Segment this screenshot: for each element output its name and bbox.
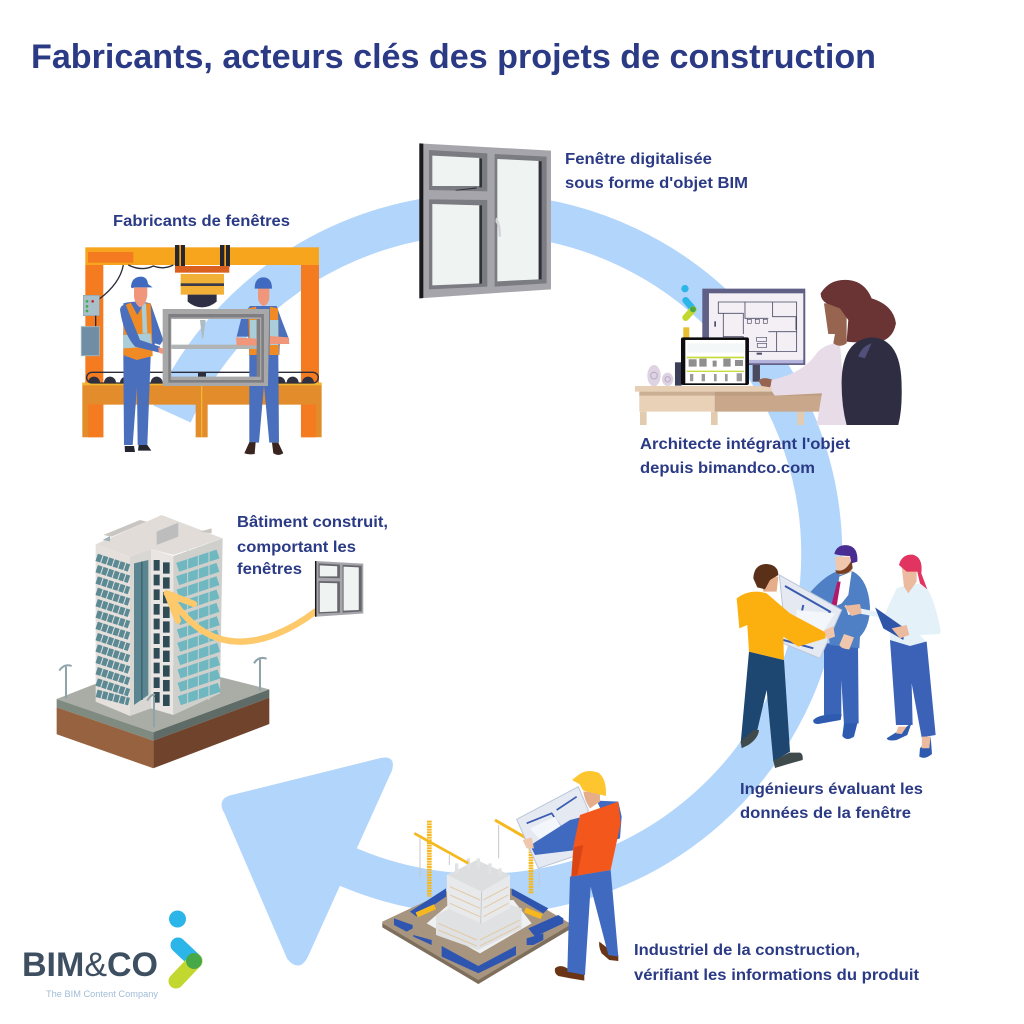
logo tagline: The BIM Content Company — [46, 989, 159, 999]
title: Fabricants, acteurs clés des projets de construction — [31, 38, 876, 76]
label: Fenêtre digitalisée — [565, 151, 748, 192]
circular process arrow — [172, 214, 822, 964]
label: Industriel — [634, 942, 920, 984]
worker left — [120, 277, 163, 452]
label: Bâtiment construit: Bâtiment construit, — [237, 514, 388, 531]
label: Fabricants de fenêtres: Fabricants de fenêtres — [113, 213, 290, 230]
label: Architecte — [640, 436, 851, 477]
tablet — [681, 337, 749, 385]
logo wordmark: BIM&CO — [22, 946, 158, 984]
right face windows — [178, 554, 219, 701]
label: Industriel: Industriel de la construction, — [634, 942, 860, 959]
blueprint — [770, 575, 842, 658]
illustration: architect at desk — [635, 280, 902, 425]
press machine frame — [82, 247, 322, 437]
label: Fenêtre digitalisée: sous forme d'objet BIM — [565, 175, 748, 192]
label: Architecte: Architecte intégrant l'objet — [640, 436, 851, 453]
inspector with plan — [517, 771, 622, 981]
label: Bâtiment construit: fenêtres — [237, 561, 302, 578]
yellow arrow — [167, 593, 315, 642]
street lamps — [59, 658, 267, 727]
logo icon — [169, 910, 202, 981]
worker right — [237, 277, 289, 455]
label: Ingénieurs: Ingénieurs évaluant les — [740, 781, 923, 798]
small window — [315, 561, 363, 617]
monitor with floor plan — [702, 289, 805, 382]
illustration: construction site and inspector — [382, 771, 622, 984]
illustration: finished building — [57, 515, 363, 768]
engineer in yellow shirt — [737, 564, 835, 768]
illustration: engineers — [737, 545, 941, 768]
label: Industriel: vérifiant les informations du produit — [634, 967, 920, 984]
label: Ingénieurs — [740, 781, 923, 822]
BIM&CO logo — [22, 910, 202, 999]
illustration: window manufacturers — [81, 245, 322, 455]
bim&co mini logo — [681, 285, 696, 318]
ground block — [57, 661, 269, 768]
label: Architecte: depuis bimandco.com — [640, 460, 815, 477]
press head — [175, 245, 230, 338]
engineer in suit — [809, 545, 870, 739]
architect woman — [758, 280, 902, 425]
window being carried — [163, 309, 269, 386]
woman engineer — [844, 555, 941, 758]
label: Bâtiment construit — [237, 514, 388, 578]
left face windows — [97, 557, 129, 702]
control boxes — [81, 295, 99, 356]
label: Fenêtre digitalisée: Fenêtre digitalisée — [565, 151, 712, 168]
desk — [635, 386, 823, 425]
cranes — [414, 820, 542, 917]
workers' hands — [158, 336, 289, 354]
label: Ingénieurs: données de la fenêtre — [740, 805, 911, 822]
building under construction — [436, 858, 522, 950]
label: Bâtiment construit: comportant les — [237, 539, 356, 556]
illustration: BIM window — [419, 143, 551, 298]
rolled plans and pens — [647, 327, 689, 386]
centre column windows — [154, 560, 170, 706]
site base — [382, 873, 570, 984]
tower — [96, 515, 223, 716]
